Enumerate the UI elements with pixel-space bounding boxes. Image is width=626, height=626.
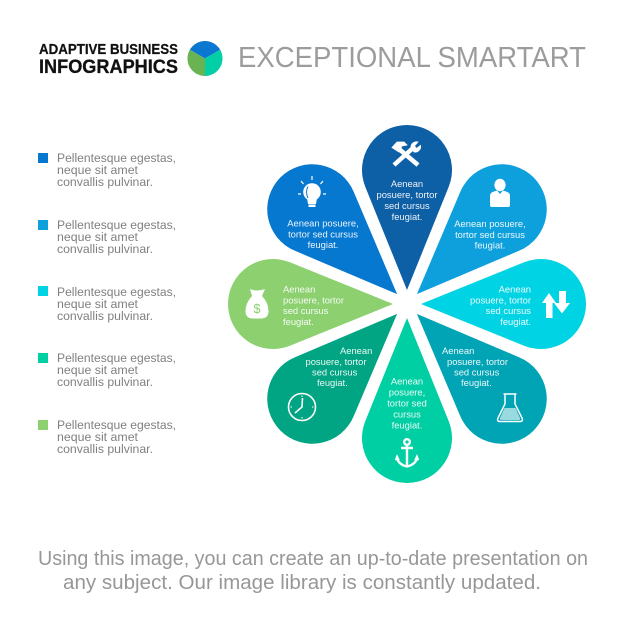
petal: right: sed cursus	[486, 305, 531, 316]
petal: lower left: Aenean	[340, 345, 372, 356]
legend item 1: Pellentesque egestas,	[57, 151, 176, 165]
legend item 1: neque sit amet	[57, 163, 139, 177]
petal: right: posuere, tortor	[470, 294, 531, 306]
petal: right	[421, 259, 586, 349]
footer description	[38, 548, 588, 594]
petal: upper left: tortor sed cursus	[288, 228, 358, 240]
petal: left: Aenean	[283, 284, 315, 294]
petal: right: feugiat.	[500, 316, 531, 327]
petal: left: feugiat.	[283, 316, 314, 327]
icon: flask	[498, 394, 522, 422]
petal: top: feugiat.	[392, 211, 422, 222]
petal: lower right: Aenean	[442, 345, 474, 356]
petal: bottom: feugiat.	[392, 420, 422, 430]
legend item 2: convallis pulvinar.	[57, 242, 153, 256]
legend item 3: convallis pulvinar.	[57, 309, 153, 323]
petal: lower left: feugiat.	[317, 377, 348, 388]
footer description: Using this image, you can create an up-to-date presentation on	[38, 548, 588, 570]
icon: arrows	[542, 291, 570, 318]
petal: bottom: tortor sed	[387, 398, 427, 408]
footer description: any subject. Our image library is constantly updated.	[63, 572, 541, 594]
petal: lower right: posuere, tortor	[447, 356, 508, 367]
petal: upper right	[385, 146, 565, 326]
legend item 3	[38, 285, 176, 323]
petal: upper right: tortor sed cursus	[455, 229, 525, 240]
petal: left: sed cursus	[283, 305, 329, 316]
legend item 1	[38, 151, 176, 189]
petal: upper right: feugiat.	[475, 240, 505, 250]
legend item 3: neque sit amet	[57, 297, 139, 311]
legend item 4: Pellentesque egestas,	[57, 351, 176, 365]
legend list	[38, 151, 176, 456]
petal: bottom: posuere,	[389, 386, 425, 398]
petal: upper right: Aenean posuere,	[454, 218, 526, 229]
petal: top: Aenean	[391, 178, 423, 189]
legend item 5	[38, 418, 176, 456]
legend item 5: Pellentesque egestas,	[57, 418, 176, 432]
petal: top: sed cursus	[384, 200, 430, 211]
legend item 4: neque sit amet	[57, 363, 139, 377]
legend item 5: convallis pulvinar.	[57, 442, 153, 456]
petal: bottom	[362, 318, 452, 483]
petal: left	[228, 259, 393, 349]
legend item 2	[38, 218, 176, 256]
icon: anchor	[395, 439, 419, 467]
header brand text: INFOGRAPHICS	[39, 56, 178, 78]
icon: logo pie	[187, 41, 223, 76]
petal: left: posuere, tortor	[283, 294, 344, 306]
petal: top	[362, 125, 452, 290]
petal: bottom: Aenean	[391, 376, 423, 386]
petal: upper left	[249, 146, 429, 326]
petal: lower right: feugiat.	[461, 377, 492, 388]
legend item 4	[38, 351, 176, 389]
petal: bottom: cursus	[393, 408, 421, 420]
icon: money bag	[246, 289, 268, 318]
header brand text	[39, 42, 178, 78]
icon: clock	[288, 394, 316, 420]
legend item 2: neque sit amet	[57, 230, 139, 244]
petal: lower left	[249, 282, 429, 462]
header brand text: ADAPTIVE BUSINESS	[39, 42, 178, 58]
petal: right: Aenean	[499, 284, 531, 294]
petal: lower left: sed cursus	[312, 366, 358, 378]
legend item 3: Pellentesque egestas,	[57, 285, 176, 299]
petal: lower left: posuere, tortor	[306, 356, 366, 367]
legend item 1: convallis pulvinar.	[57, 175, 153, 189]
legend item 4: convallis pulvinar.	[57, 375, 153, 389]
petal: upper left: Aenean posuere,	[287, 218, 359, 228]
legend item 2: Pellentesque egestas,	[57, 218, 176, 232]
petal diagram	[228, 125, 586, 483]
petal: upper left: feugiat.	[308, 239, 338, 250]
petal: lower right	[385, 282, 565, 462]
petal: lower right: sed cursus	[454, 366, 500, 378]
legend item 5: neque sit amet	[57, 430, 139, 444]
icon: person	[490, 179, 510, 207]
title: EXCEPTIONAL SMARTART	[238, 42, 586, 74]
icon: money bag: $	[253, 301, 261, 316]
icon: tools	[392, 142, 421, 165]
petal: top: posuere, tortor	[377, 189, 437, 200]
icon: light bulb	[298, 176, 326, 207]
